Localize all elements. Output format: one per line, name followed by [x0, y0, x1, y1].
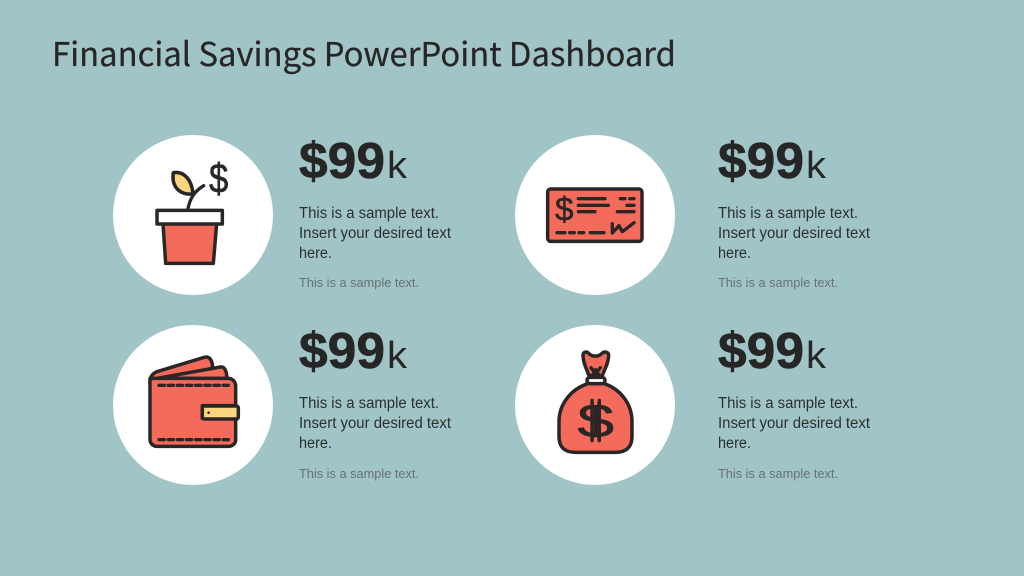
- caption: This is a sample text.: [299, 466, 419, 481]
- metric value: k: [806, 335, 827, 377]
- panel: plant savings: [113, 132, 452, 295]
- metric value: $99: [718, 322, 804, 379]
- description: This is a sample text.: [299, 205, 439, 222]
- icon: cheque: $: [555, 192, 574, 229]
- description: Insert your desired text: [299, 415, 452, 432]
- icon: money bag: $: [577, 395, 614, 448]
- panel: cheque savings: [515, 132, 871, 295]
- description: This is a sample text.: [718, 395, 858, 412]
- icon: potted plant with dollar: [113, 135, 273, 295]
- caption: This is a sample text.: [299, 275, 419, 290]
- icon: potted plant with dollar: $: [209, 155, 228, 202]
- description: Insert your desired text: [299, 225, 452, 242]
- description: here.: [718, 245, 751, 262]
- description: Insert your desired text: [718, 415, 871, 432]
- description: Insert your desired text: [718, 225, 871, 242]
- icon: wallet: [113, 325, 273, 485]
- title: Financial Savings PowerPoint Dashboard: [52, 28, 676, 76]
- metric value: $99: [299, 132, 385, 189]
- caption: This is a sample text.: [718, 275, 838, 290]
- metric value: $99: [299, 322, 385, 379]
- description: here.: [299, 245, 332, 262]
- description: [718, 395, 871, 452]
- description: This is a sample text.: [718, 205, 858, 222]
- panel: money bag savings: [515, 322, 871, 485]
- description: [718, 205, 871, 262]
- icon: cheque: [515, 135, 675, 295]
- description: This is a sample text.: [299, 395, 439, 412]
- description: [299, 395, 452, 452]
- icon: money bag: [515, 325, 675, 485]
- metric value: k: [387, 145, 408, 187]
- panel: wallet savings: [113, 322, 452, 485]
- metric value: k: [806, 145, 827, 187]
- metric value: k: [387, 335, 408, 377]
- description: [299, 205, 452, 262]
- description: here.: [299, 435, 332, 452]
- caption: This is a sample text.: [718, 466, 838, 481]
- description: here.: [718, 435, 751, 452]
- metric value: $99: [718, 132, 804, 189]
